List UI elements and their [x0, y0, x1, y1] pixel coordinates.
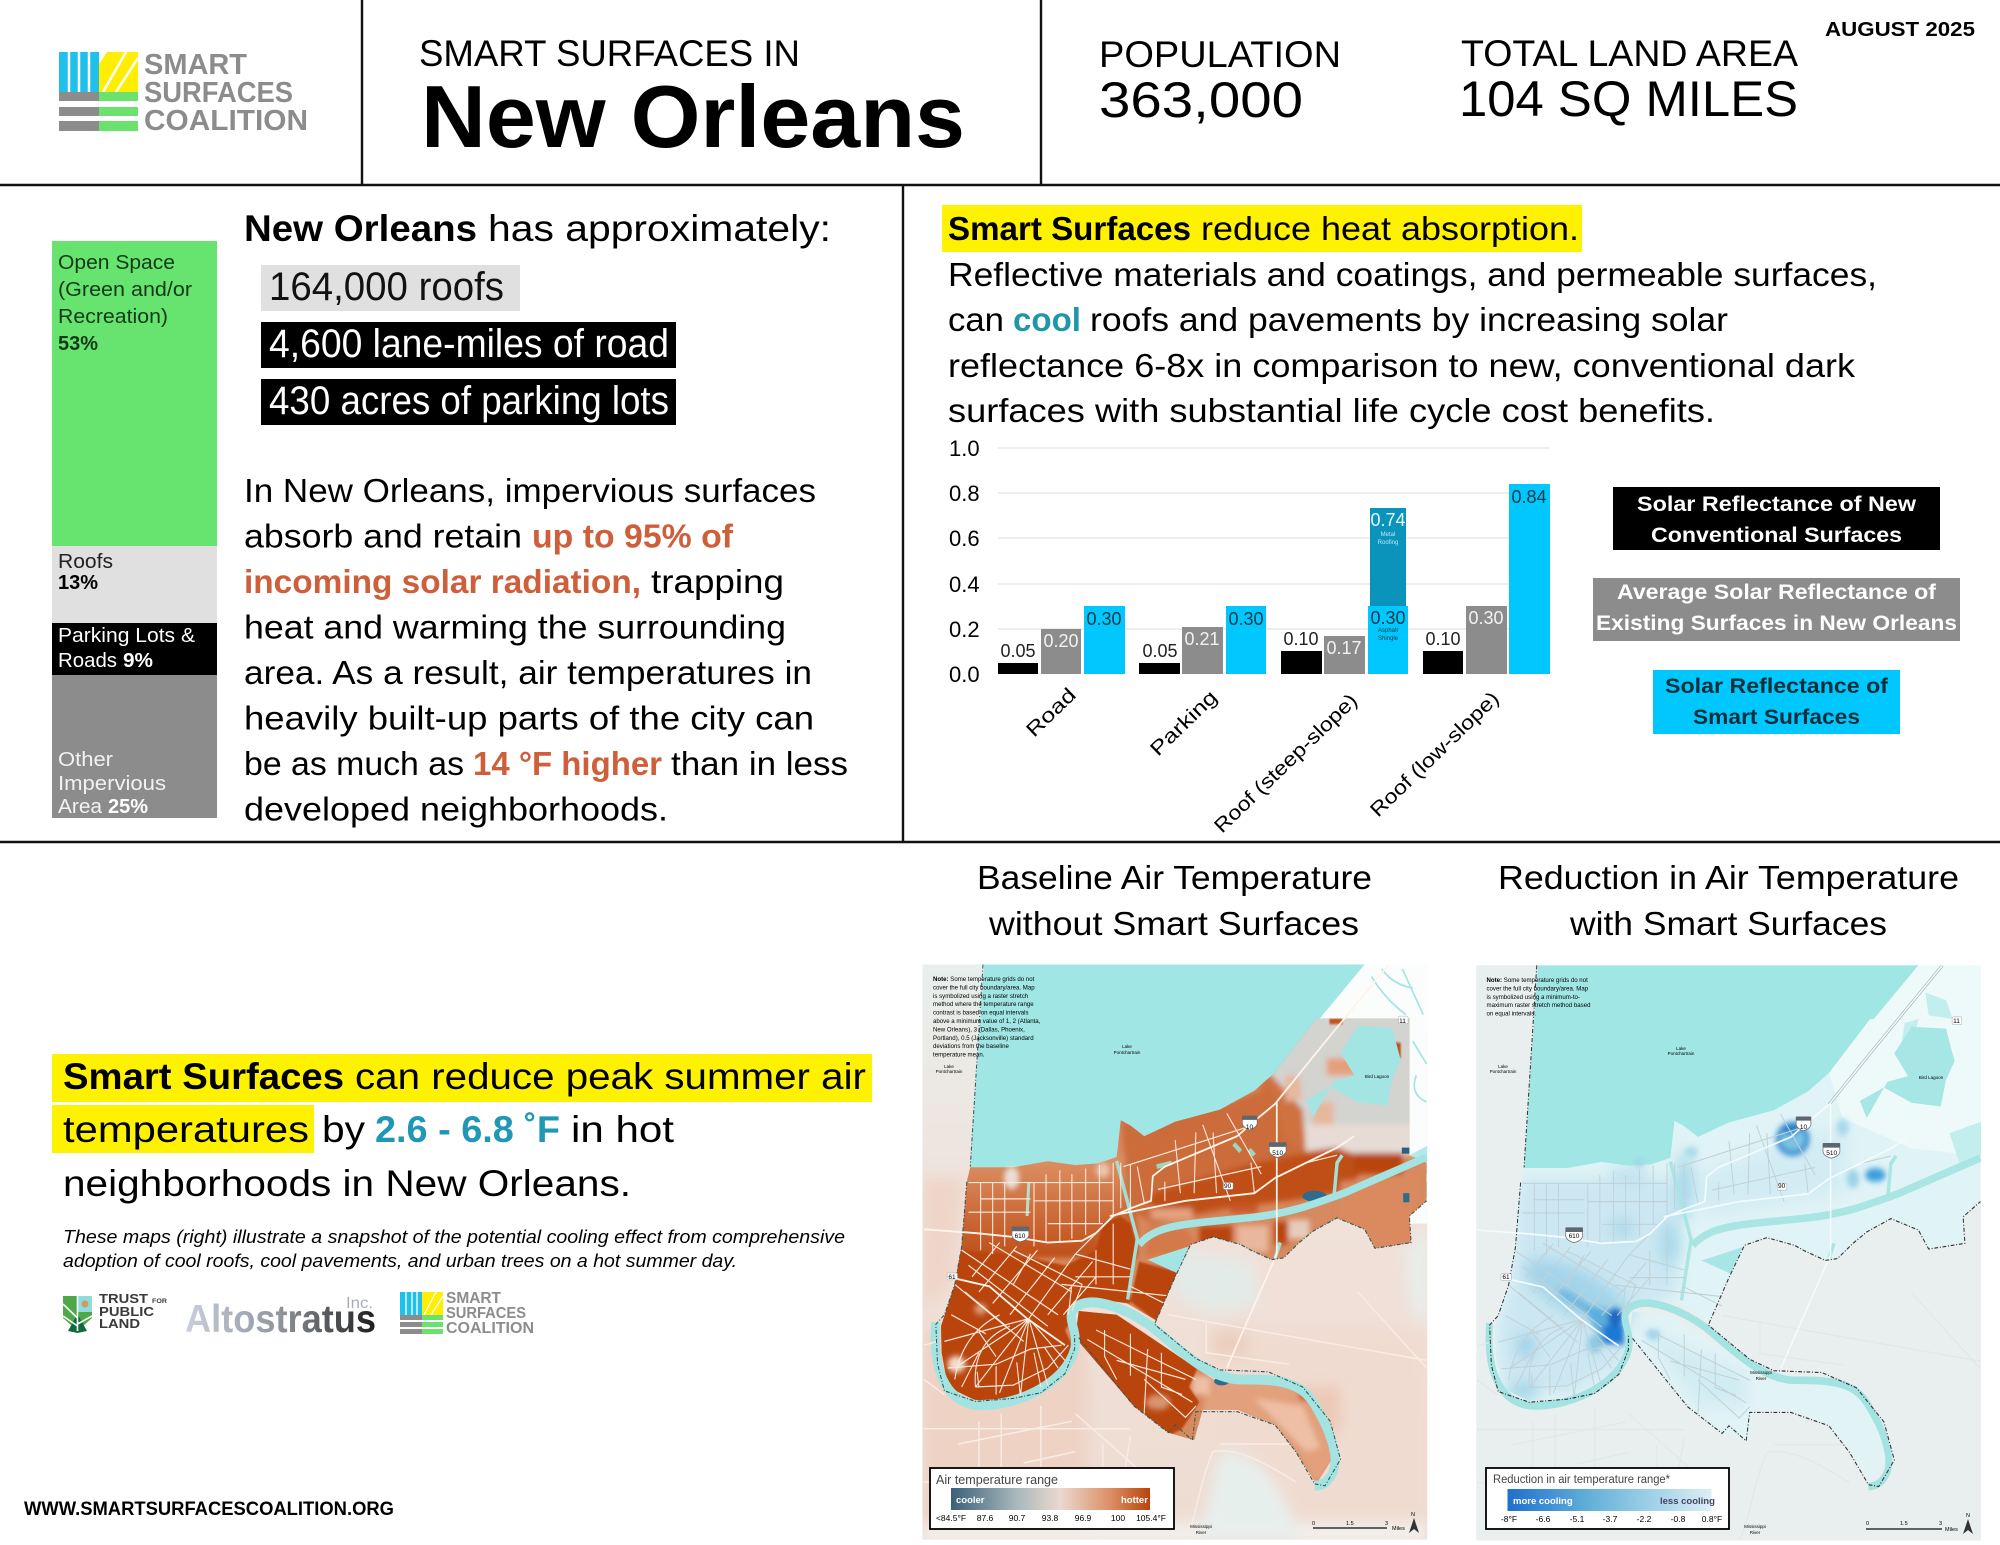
bar chart: solar reflectance: 0.10 [1283, 629, 1319, 649]
callout: reduce peak summer air temperatures [52, 1054, 872, 1204]
water labels: Lake [944, 1064, 954, 1069]
date: AUGUST 2025 [1825, 19, 1975, 41]
stat: total land area [1459, 33, 1798, 127]
scale bar and north arrow [1312, 1512, 1419, 1533]
legend: reduction in air temperature range: -8°F [1501, 1514, 1517, 1524]
bars: roof steep-slope [1281, 508, 1408, 674]
text block: impervious surfaces paragraph: trapping [651, 563, 784, 600]
callout: reduce peak summer air temperatures: by [322, 1109, 366, 1150]
stat: population: 363,000 [1099, 72, 1303, 128]
shield labels: 11 [1399, 1018, 1406, 1025]
water labels: River [1756, 1376, 1767, 1381]
shield labels [1502, 1018, 1960, 1281]
stat: population [1099, 34, 1341, 128]
stacked bar: land cover: 53% [58, 333, 98, 355]
text block: impervious surfaces paragraph: In New Orleans, impervious surfaces [244, 472, 816, 509]
scale bar and north arrow: 1.5 [1900, 1521, 1908, 1527]
category labels [1022, 684, 1504, 838]
text block: solar reflectance paragraph: cool [1013, 301, 1081, 338]
heading: New Orleans has approximately: New Orleans [244, 208, 477, 249]
water labels: Bird Lagoon [1919, 1075, 1944, 1080]
logo: Altostratus: Inc. [346, 1295, 373, 1312]
callout: reduce peak summer air temperatures: 2.6 - 6.8 ˚F [375, 1109, 560, 1150]
bar chart: solar reflectance [949, 436, 1550, 838]
logo: Smart Surfaces Coalition small: COALITION [446, 1320, 534, 1337]
bar chart: solar reflectance: 0.6 [949, 526, 980, 551]
legend: air temperature range: 90.7 [1009, 1513, 1026, 1523]
bar chart: solar reflectance: 0.30 [1228, 609, 1264, 629]
bar chart: solar reflectance: 0.10 [1425, 629, 1461, 649]
text block: map note: These maps (right) illustrate a snapshot of the potential cooling effect from comprehensive [63, 1226, 845, 1247]
shield labels: 510 [1826, 1150, 1838, 1157]
water [1701, 1027, 1955, 1274]
text block: impervious surfaces paragraph: heat and warming the surrounding [244, 608, 786, 646]
roads [1486, 1342, 1492, 1344]
legend: reduction in air temperature range: -6.6 [1536, 1514, 1551, 1524]
legend: reduction in air temperature range: 0.8°F [1702, 1514, 1722, 1524]
bar chart: solar reflectance: 0.17 [1326, 638, 1362, 658]
bar chart: solar reflectance: 0.20 [1043, 631, 1079, 651]
stat: total land area: 104 SQ MILES [1459, 71, 1798, 127]
stat: population: POPULATION [1099, 34, 1341, 75]
map note: Note: Some temperature grids do not [933, 976, 1035, 983]
text block: impervious surfaces paragraph: developed neighborhoods. [244, 790, 668, 828]
legend: smart surfaces: Smart Surfaces [1693, 706, 1860, 729]
scale bar and north arrow: 0 [1312, 1521, 1315, 1527]
map note [1486, 977, 1590, 1018]
bars: roof low-slope [1423, 484, 1550, 674]
water labels: River [1750, 1530, 1761, 1535]
text block: impervious surfaces paragraph: 14 °F higher [473, 745, 662, 782]
stacked bar: land cover: 9% [123, 650, 153, 672]
city temperature layers [941, 1018, 1426, 1482]
legend: new conventional surfaces: Conventional Surfaces [1651, 524, 1902, 547]
bar chart: solar reflectance: 0.74 [1370, 510, 1406, 530]
callout: reduce peak summer air temperatures: in hot [571, 1109, 675, 1150]
water labels: Lake [1498, 1064, 1508, 1069]
stacked bar: land cover: Roads [58, 650, 117, 672]
logo: Smart Surfaces Coalition small [400, 1290, 534, 1337]
bar chart: solar reflectance: 0.2 [949, 617, 980, 642]
text block: impervious surfaces paragraph: than in less [671, 745, 848, 782]
map note: deviations from the baseline [933, 1043, 1009, 1050]
callout: reduce peak summer air temperatures: temperatures [63, 1109, 309, 1150]
logo: Smart Surfaces Coalition: COALITION [144, 105, 308, 137]
title: New Orleans [421, 67, 965, 166]
text block: impervious surfaces paragraph: be as much as [244, 745, 464, 782]
map note: contrast is based on equal intervals [933, 1010, 1029, 1017]
legend: reduction in air temperature range: -5.1 [1570, 1514, 1585, 1524]
water labels: Lake [1676, 1046, 1686, 1051]
stat: total land area: TOTAL LAND AREA [1461, 33, 1798, 74]
legend: existing surfaces [1593, 578, 1960, 641]
map heading: reduction in air temperature: Reduction in Air Temperature [1498, 859, 1959, 896]
text block: impervious surfaces paragraph: heavily built-up parts of the city can [244, 700, 814, 736]
category labels: Road [1022, 684, 1081, 742]
logo: Trust for Public Land: TRUST [99, 1291, 148, 1306]
map heading: reduction in air temperature: with Smart Surfaces [1569, 905, 1887, 942]
website: WWW.SMARTSURFACESCOALITION.ORG [24, 1499, 394, 1520]
scale bar and north arrow: 3 [1385, 1521, 1388, 1527]
bar chart: solar reflectance: Asphalt [1378, 628, 1398, 634]
stacked bar: land cover: Open Space [58, 252, 175, 274]
bar chart: solar reflectance: Metal [1381, 532, 1395, 538]
map note: is symbolized using a minimum-to- [1486, 994, 1580, 1001]
stacked bar: land cover: Recreation) [58, 306, 168, 328]
bar chart: solar reflectance: 0.0 [949, 662, 980, 687]
legend: existing surfaces: Existing Surfaces in New Orleans [1596, 612, 1957, 635]
shield labels: 510 [1272, 1150, 1284, 1157]
text block: impervious surfaces paragraph: up to 95% of [532, 518, 734, 554]
callout: reduce peak summer air temperatures: neighborhoods in New Orleans. [63, 1163, 631, 1204]
legend: reduction in air temperature range: less cooling [1660, 1496, 1715, 1507]
map heading: reduction in air temperature [1498, 859, 1959, 942]
shield labels: 90 [1224, 1183, 1232, 1190]
logo: Smart Surfaces Coalition small: SURFACES [446, 1305, 526, 1322]
text block: solar reflectance paragraph: Smart Surfaces [948, 210, 1191, 247]
water labels [936, 1044, 1390, 1535]
text block: impervious surfaces paragraph: area. As a result, air temperatures in [244, 654, 812, 691]
text block: map note [63, 1226, 845, 1271]
stacked bar: land cover: Other [58, 749, 113, 771]
water labels [1490, 1046, 1944, 1535]
scale bar and north arrow: 3 [1939, 1521, 1942, 1527]
highway shields [1796, 1117, 1811, 1131]
text block: impervious surfaces paragraph: absorb and retain [244, 518, 522, 554]
scale bar and north arrow: N [1966, 1513, 1970, 1519]
map note [933, 976, 1041, 1059]
text block: solar reflectance paragraph [942, 205, 1877, 429]
stat chip: parking: 430 acres of parking lots [269, 379, 669, 423]
legend: smart surfaces [1653, 670, 1900, 734]
category labels: Roof (steep-slope) [1210, 690, 1362, 838]
roads [924, 1292, 1427, 1540]
title: SMART SURFACES IN [419, 33, 800, 74]
text block: map note: adoption of cool roofs, cool pavements, and urban trees on a hot summer day. [63, 1250, 737, 1271]
map note: New Orleans), 3 (Dallas, Phoenix, [933, 1026, 1025, 1033]
legend: new conventional surfaces: Solar Reflectance of New [1637, 493, 1917, 516]
highway shields [1242, 1116, 1257, 1130]
text block: solar reflectance paragraph: roofs and pavements by increasing solar [1090, 301, 1728, 338]
logo: Smart Surfaces Coalition [59, 49, 308, 137]
legend: air temperature range [930, 1468, 1174, 1529]
map note: Note: Some temperature grids do not [1486, 977, 1588, 984]
category labels: Roof (low-slope) [1366, 688, 1504, 822]
logo: Trust for Public Land [63, 1291, 168, 1333]
legend: air temperature range: cooler [956, 1495, 985, 1506]
shield labels: 610 [1015, 1233, 1026, 1240]
map note: is symbolized using a raster stretch [933, 993, 1028, 1000]
text block: impervious surfaces paragraph [244, 472, 848, 828]
shield labels: 61 [948, 1274, 956, 1281]
map heading: baseline air temperature [977, 859, 1372, 942]
water labels: Pontchartrain [1114, 1050, 1141, 1055]
bar chart: solar reflectance: 0.30 [1086, 609, 1122, 629]
map note: Portland), 0.5 (Jacksonville) standard [933, 1035, 1034, 1042]
legend: existing surfaces: Average Solar Reflectance of [1617, 581, 1937, 604]
cooling blobs [1497, 1133, 1850, 1407]
top right marsh [1320, 964, 1427, 1224]
stacked bar: land cover: 25% [108, 796, 148, 818]
legend: reduction in air temperature range: -2.2 [1637, 1514, 1652, 1524]
map: reduction in air temperature [1476, 965, 1981, 1541]
stacked bar: land cover [52, 241, 217, 818]
logo: Smart Surfaces Coalition: SURFACES [144, 77, 293, 109]
map heading: baseline air temperature: without Smart Surfaces [988, 905, 1359, 942]
logo: Trust for Public Land: FOR [152, 1299, 168, 1305]
text block: solar reflectance paragraph: reflectance 6-8x in comparison to new, conventional dark [948, 347, 1856, 384]
stacked bar: land cover: Roofs [58, 551, 113, 573]
legend: air temperature range: 100 [1111, 1513, 1125, 1523]
water labels: River [1196, 1530, 1207, 1535]
heading: New Orleans has approximately: has approximately: [488, 208, 831, 249]
legend: air temperature range: 96.9 [1075, 1513, 1092, 1523]
shield labels: 11 [1953, 1018, 1960, 1025]
scale bar and north arrow: Miles [1945, 1527, 1958, 1533]
bar chart: solar reflectance: 1.0 [949, 436, 980, 461]
water labels: Bird Lagoon [1365, 1074, 1390, 1079]
legend: reduction in air temperature range: -0.8 [1671, 1514, 1686, 1524]
bar chart: solar reflectance: Roofing [1378, 540, 1398, 546]
legend: reduction in air temperature range: -3.7 [1603, 1514, 1618, 1524]
legend: air temperature range: 87.6 [977, 1513, 994, 1523]
category labels: Parking [1146, 686, 1222, 761]
header panel [59, 19, 1975, 166]
stacked bar: land cover: (Green and/or [58, 279, 192, 301]
water labels: Mississippi [1750, 1370, 1772, 1375]
bar chart: solar reflectance: 0.05 [1142, 641, 1178, 661]
text block: solar reflectance paragraph: reduce heat absorption. [1201, 210, 1579, 247]
map note: cover the full city boundary/area. Map [1486, 985, 1589, 992]
shield labels: 90 [1778, 1183, 1786, 1190]
bar chart: solar reflectance: Shingle [1378, 636, 1399, 642]
map note: temperature mean. [933, 1052, 985, 1059]
shield labels: 10 [1246, 1124, 1253, 1131]
stacked bar: land cover: Parking Lots & [58, 625, 196, 647]
water labels: Mississippi [1744, 1524, 1766, 1529]
bars: road [998, 606, 1125, 674]
stat chip: roofs: 164,000 roofs [269, 265, 504, 309]
text block: solar reflectance paragraph: Reflective materials and coatings, and permeable surfaces, [948, 256, 1877, 293]
legend: air temperature range: Air temperature range [936, 1472, 1058, 1487]
legend: air temperature range: 93.8 [1042, 1513, 1059, 1523]
stacked bar: land cover: Area [58, 796, 103, 818]
hottest core [934, 1018, 1401, 1436]
legend: air temperature range: 105.4°F [1136, 1513, 1166, 1523]
scale bar and north arrow [1866, 1513, 1973, 1534]
callout: reduce peak summer air temperatures: Smart Surfaces [63, 1056, 344, 1097]
water labels: Lake [1122, 1044, 1132, 1049]
legend: smart surfaces: Solar Reflectance of [1665, 675, 1889, 698]
map note: on equal intervals. [1486, 1011, 1536, 1018]
bar chart: solar reflectance: 0.05 [1000, 641, 1036, 661]
bar chart: solar reflectance: 0.4 [949, 572, 980, 597]
legend: reduction in air temperature range: more cooling [1513, 1496, 1573, 1507]
water [1148, 1026, 1401, 1273]
water labels: Pontchartrain [936, 1069, 963, 1074]
shield labels: 10 [1800, 1124, 1807, 1131]
legend: new conventional surfaces [1613, 487, 1940, 550]
shield labels: 610 [1569, 1233, 1580, 1240]
legend: reduction in air temperature range [1486, 1468, 1729, 1529]
stacked bar: land cover: Impervious [58, 773, 166, 795]
panel: smart surfaces reduce heat absorption [942, 205, 1960, 838]
water labels: Pontchartrain [1668, 1051, 1695, 1056]
bar chart: solar reflectance: 0.84 [1511, 487, 1547, 507]
logo: Smart Surfaces Coalition: SMART [144, 49, 247, 81]
scale bar and north arrow: 1.5 [1346, 1521, 1354, 1527]
panel: peak temperature reduction [24, 1054, 872, 1520]
logo: Smart Surfaces Coalition small: SMART [446, 1290, 502, 1307]
map note: cover the full city boundary/area. Map [933, 984, 1035, 991]
legend: air temperature range: <84.5°F [936, 1513, 966, 1523]
legend: air temperature range: hotter [1121, 1495, 1148, 1506]
text block: impervious surfaces paragraph: incoming solar radiation, [244, 563, 641, 600]
scale bar and north arrow: N [1411, 1512, 1415, 1518]
stacked bar: land cover: 13% [58, 572, 98, 594]
bar chart: solar reflectance: 0.8 [949, 481, 980, 506]
logo: Trust for Public Land: PUBLIC [99, 1304, 155, 1319]
panel: land cover and impervious surfaces [52, 208, 848, 828]
callout: reduce peak summer air temperatures: can reduce peak summer air [355, 1056, 866, 1097]
map heading: baseline air temperature: Baseline Air Temperature [977, 859, 1372, 896]
scale bar and north arrow: Miles [1392, 1526, 1405, 1532]
bars: parking [1139, 606, 1266, 674]
bar chart: solar reflectance: 0.21 [1184, 629, 1220, 649]
shield labels [948, 1018, 1406, 1281]
logo: Trust for Public Land: LAND [99, 1316, 140, 1331]
bar chart: solar reflectance: 0.30 [1370, 608, 1406, 628]
map note: method where the temperature range [933, 1001, 1034, 1008]
stat chip: road: 4,600 lane-miles of road [269, 322, 669, 366]
text block: solar reflectance paragraph: can [948, 301, 1004, 338]
heading: New Orleans has approximately [244, 208, 831, 249]
bar chart: solar reflectance: 0.30 [1468, 608, 1504, 628]
scale bar and north arrow: 0 [1866, 1521, 1869, 1527]
water labels: Pontchartrain [1490, 1069, 1517, 1074]
logo: Altostratus: Altostratus [185, 1298, 376, 1341]
shield labels: 61 [1502, 1274, 1510, 1281]
map: baseline air temperature [922, 964, 1433, 1543]
map note: above a minimum value of 1, 2 (Atlanta, [933, 1018, 1041, 1025]
water labels: Mississippi [1190, 1524, 1212, 1529]
legend: reduction in air temperature range: Reduction in air temperature range* [1493, 1474, 1671, 1486]
map note: maximum raster stretch method based [1486, 1002, 1590, 1009]
text block: solar reflectance paragraph: surfaces with substantial life cycle cost benefits. [948, 392, 1715, 429]
